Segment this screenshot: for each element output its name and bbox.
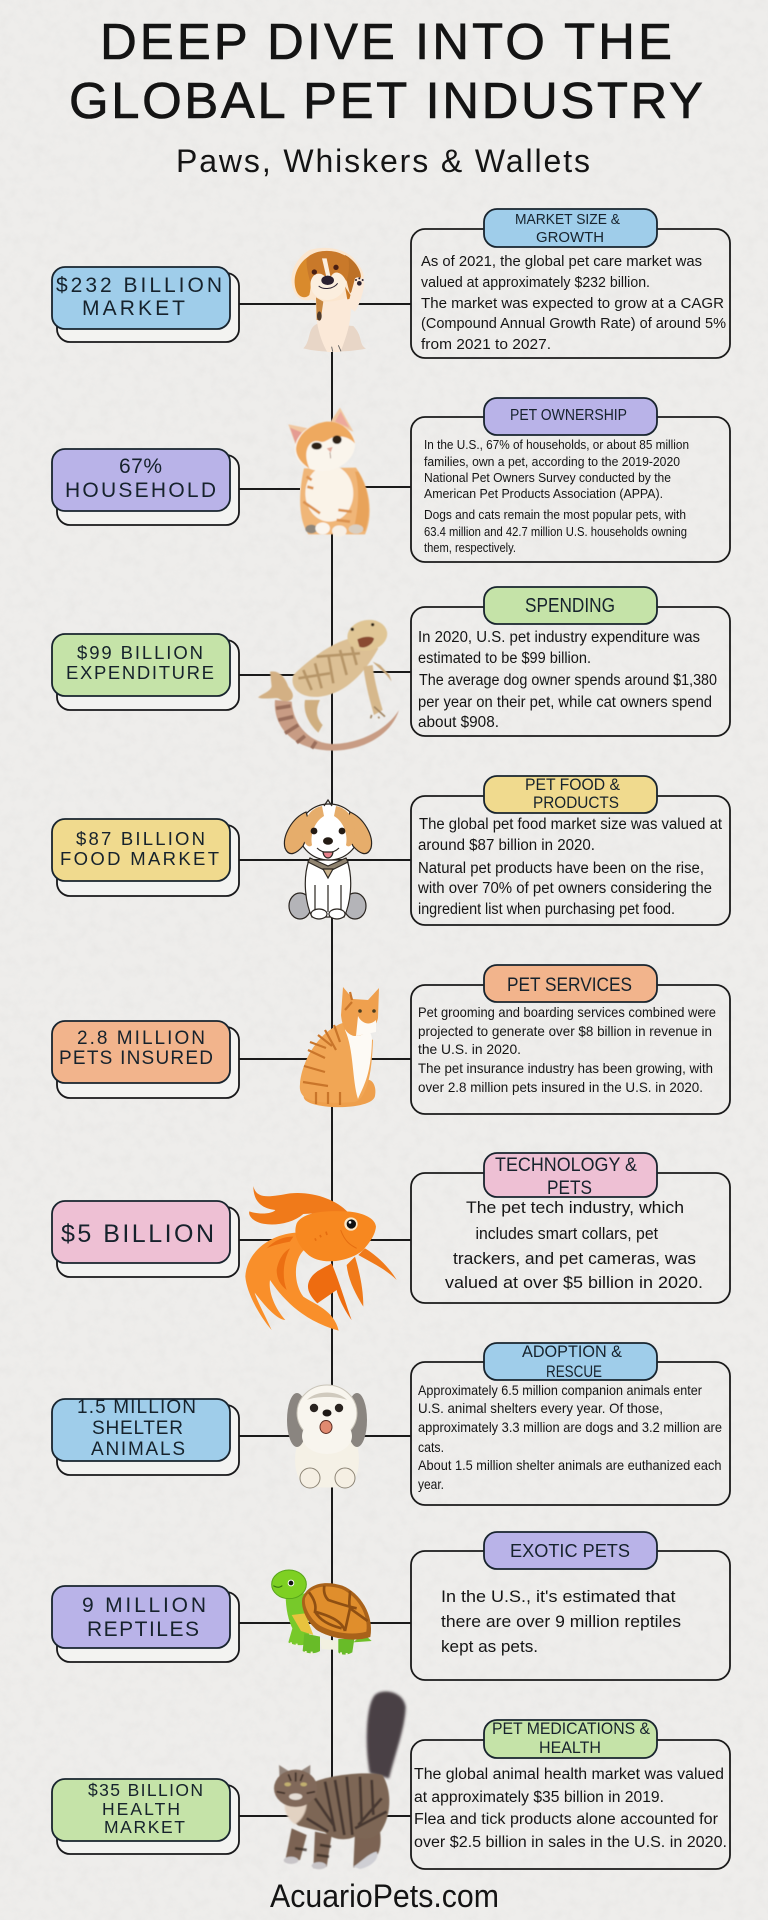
section: exotic pets xyxy=(52,1532,730,1680)
panel: pet food and products: Natural pet products have been on the rise, xyxy=(418,860,704,877)
stat box: 2.8 million pets insured: 2.8 MILLION xyxy=(77,1028,205,1049)
stat box: 67% household: 67% xyxy=(119,455,162,478)
stat box: 9 million reptiles xyxy=(52,1586,239,1662)
icon: fluffy tabby cat xyxy=(274,1691,406,1869)
panel: pet food and products: around $87 billion in 2020. xyxy=(418,837,595,854)
stat box: $87 billion food market: $87 BILLION xyxy=(76,828,205,849)
stat box: $99 billion expenditure: EXPENDITURE xyxy=(66,662,214,683)
section: pet services xyxy=(52,965,730,1114)
stat box: $87 billion food market: FOOD MARKET xyxy=(60,848,219,869)
section: market size xyxy=(52,209,730,358)
icon: beagle puppy xyxy=(291,248,366,352)
section: pet health xyxy=(52,1691,730,1869)
panel: pet ownership: PET OWNERSHIP xyxy=(510,407,627,424)
stat box: $99 billion expenditure xyxy=(52,634,239,710)
panel: adoption and rescue: cats. xyxy=(418,1439,444,1455)
title xyxy=(69,13,703,129)
panel: pet ownership: families, own a pet, according to the 2019-2020 xyxy=(424,454,680,469)
panel: pet food and products: PRODUCTS xyxy=(533,793,619,812)
stat box: 67% household: HOUSEHOLD xyxy=(65,479,216,502)
panel: pet food and products: with over 70% of pet owners considering the xyxy=(417,880,712,897)
icon: ginger kitten xyxy=(288,408,370,537)
stat box: $35 billion health market xyxy=(52,1779,239,1854)
connector lines xyxy=(239,304,411,1816)
panel: adoption and rescue: Approximately 6.5 million companion animals enter xyxy=(418,1382,702,1398)
panel: pet medications and health: The global animal health market was valued xyxy=(414,1766,724,1783)
panel: technology and pets: includes smart collars, pet xyxy=(476,1224,658,1243)
stat box: 67% household xyxy=(52,449,239,525)
panel: pet ownership xyxy=(411,398,730,562)
stat box: 1.5 million shelter animals xyxy=(52,1397,239,1475)
panel: exotic pets xyxy=(411,1532,730,1680)
panel: spending: per year on their pet, while cat owners spend xyxy=(418,694,712,711)
panel: exotic pets: kept as pets. xyxy=(441,1637,538,1656)
panel: market size and growth: valued at approximately $232 billion. xyxy=(421,274,650,291)
panel: pet medications and health: PET MEDICATIONS & xyxy=(492,1719,651,1738)
panel: technology and pets xyxy=(411,1153,730,1303)
panel: pet medications and health: Flea and tick products alone accounted for xyxy=(414,1811,718,1828)
panel: market size and growth xyxy=(411,209,730,358)
icon: shih tzu xyxy=(287,1385,367,1488)
stat box: $232 billion market xyxy=(52,267,239,342)
panel: market size and growth: MARKET SIZE & xyxy=(515,211,620,228)
panel: pet medications and health: HEALTH xyxy=(539,1738,601,1757)
panel: pet food and products: PET FOOD & xyxy=(525,775,621,794)
panel: pet ownership: In the U.S., 67% of households, or about 85 million xyxy=(424,437,689,452)
stat box: $35 billion health market: HEALTH xyxy=(102,1799,180,1819)
panel: pet services: the U.S. in 2020. xyxy=(418,1041,521,1057)
panel: spending: SPENDING xyxy=(525,595,615,617)
panel: spending: The average dog owner spends around $1,380 xyxy=(419,672,717,689)
title: GLOBAL PET INDUSTRY xyxy=(69,72,703,129)
icon: goldfish xyxy=(245,1186,397,1331)
panel: exotic pets: EXOTIC PETS xyxy=(510,1541,630,1561)
panel: pet medications and health: at approximately $35 billion in 2019. xyxy=(414,1789,664,1806)
icon: bearded dragon xyxy=(258,617,399,751)
panel: exotic pets: there are over 9 million reptiles xyxy=(441,1612,681,1631)
panel: pet ownership: National Pet Owners Survey conducted by the xyxy=(424,470,671,485)
stat box: $87 billion food market xyxy=(52,819,239,896)
panel: pet services: The pet insurance industry has been growing, with xyxy=(418,1060,713,1076)
panel: spending: estimated to be $99 billion. xyxy=(418,650,591,667)
icon: orange tabby cat xyxy=(300,987,379,1107)
panel: adoption and rescue: U.S. animal shelters every year. Of those, xyxy=(418,1400,663,1416)
stat box: $99 billion expenditure: $99 BILLION xyxy=(77,642,203,663)
stat box: 1.5 million shelter animals: 1.5 MILLION xyxy=(77,1397,196,1418)
stat box: $232 billion market: $232 BILLION xyxy=(56,274,222,297)
panel: pet services: PET SERVICES xyxy=(507,975,632,996)
section: adoption xyxy=(52,1342,730,1505)
panel: adoption and rescue: year. xyxy=(418,1476,444,1492)
stat box: 9 million reptiles: REPTILES xyxy=(87,1618,199,1641)
stat box: $5 billion xyxy=(52,1201,239,1277)
panel: pet services xyxy=(411,965,730,1114)
panel: market size and growth: (Compound Annual Growth Rate) of around 5% xyxy=(421,315,726,332)
panel: pet food and products xyxy=(411,775,730,925)
section: technology xyxy=(52,1153,730,1331)
subtitle: Paws, Whiskers & Wallets xyxy=(176,143,590,179)
panel: technology and pets: TECHNOLOGY & xyxy=(495,1155,637,1176)
stat box: 2.8 million pets insured xyxy=(52,1021,239,1098)
icon: turtle xyxy=(272,1570,372,1655)
panel: pet ownership: them, respectively. xyxy=(424,540,516,555)
panel: spending xyxy=(411,587,730,736)
stat box: 1.5 million shelter animals: ANIMALS xyxy=(91,1439,185,1460)
panel: pet services: over 2.8 million pets insured in the U.S. in 2020. xyxy=(418,1079,703,1095)
panel: exotic pets: In the U.S., it's estimated that xyxy=(441,1587,676,1606)
stat box: $35 billion health market: $35 BILLION xyxy=(88,1780,203,1800)
stat box: 1.5 million shelter animals: SHELTER xyxy=(92,1418,183,1439)
footer brand: AcuarioPets.com xyxy=(270,1878,499,1914)
stat box: 9 million reptiles: 9 MILLION xyxy=(82,1594,206,1617)
panel: technology and pets: trackers, and pet cameras, was xyxy=(453,1249,696,1268)
panel: technology and pets: valued at over $5 billion in 2020. xyxy=(445,1273,703,1292)
panel: market size and growth: As of 2021, the global pet care market was xyxy=(421,253,702,270)
panel: adoption and rescue xyxy=(411,1342,730,1505)
panel: technology and pets: PETS xyxy=(547,1178,592,1199)
panel: adoption and rescue: ADOPTION & xyxy=(522,1342,623,1361)
panel: pet medications and health xyxy=(411,1719,730,1869)
section: pet food xyxy=(52,775,730,925)
panel: market size and growth: The market was expected to grow at a CAGR xyxy=(421,295,724,312)
panel: pet services: projected to generate over $8 billion in revenue in xyxy=(418,1023,712,1039)
title: DEEP DIVE INTO THE xyxy=(100,13,672,70)
section: pet ownership xyxy=(52,398,730,562)
panel: pet food and products: The global pet food market size was valued at xyxy=(419,816,723,833)
panel: market size and growth: from 2021 to 2027. xyxy=(421,336,551,353)
panel: spending: In 2020, U.S. pet industry expenditure was xyxy=(418,629,700,646)
panel: adoption and rescue: RESCUE xyxy=(546,1362,602,1381)
panel: spending: about $908. xyxy=(418,714,499,731)
icon: cartoon puppy xyxy=(284,800,372,919)
panel: adoption and rescue: About 1.5 million shelter animals are euthanized each xyxy=(418,1457,722,1473)
stat box: $35 billion health market: MARKET xyxy=(104,1817,185,1837)
panel: pet ownership: 63.4 million and 42.7 million U.S. households owning xyxy=(424,524,687,539)
panel: pet ownership: Dogs and cats remain the most popular pets, with xyxy=(424,507,686,522)
panel: pet food and products: ingredient list when purchasing pet food. xyxy=(418,901,675,918)
panel: technology and pets: The pet tech industry, which xyxy=(466,1198,684,1217)
section: spending xyxy=(52,587,730,751)
panel: pet medications and health: over $2.5 billion in sales in the U.S. in 2020. xyxy=(414,1834,727,1851)
stat box: 2.8 million pets insured: PETS INSURED xyxy=(59,1048,213,1069)
panel: pet services: Pet grooming and boarding services combined were xyxy=(418,1004,716,1020)
stat box: $232 billion market: MARKET xyxy=(82,297,185,320)
panel: adoption and rescue: approximately 3.3 million are dogs and 3.2 million are xyxy=(418,1419,722,1435)
stat box: $5 billion: $5 BILLION xyxy=(61,1220,214,1248)
central timeline line xyxy=(331,350,333,1782)
panel: pet ownership: American Pet Products Association (APPA). xyxy=(424,486,663,501)
panel: market size and growth: GROWTH xyxy=(536,229,604,246)
